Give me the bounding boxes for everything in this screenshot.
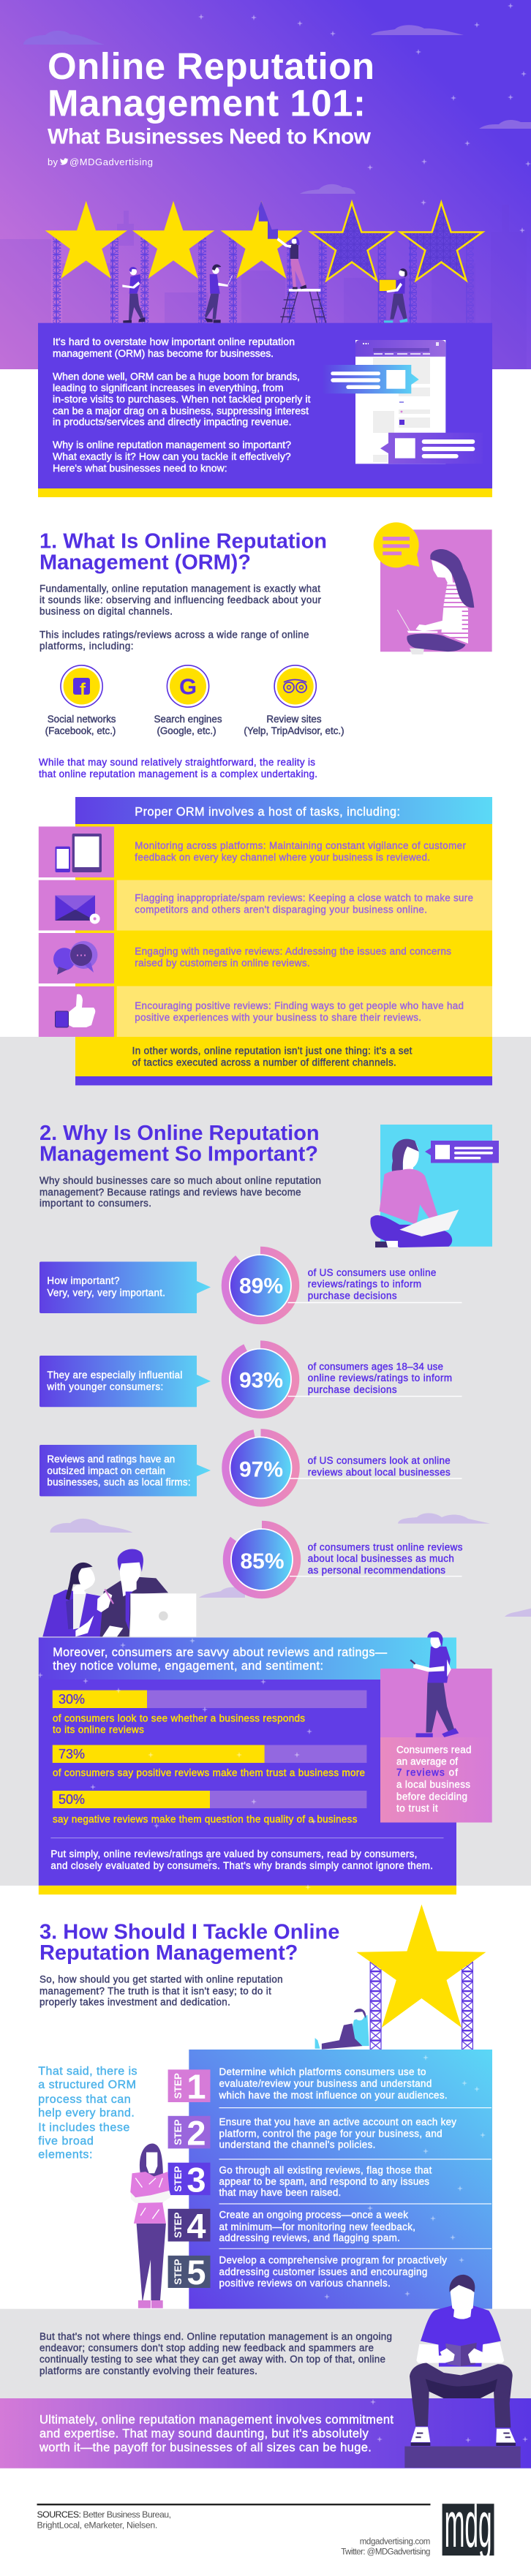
task descriptions: positive experiences with your business to share their reviews. <box>135 1012 421 1023</box>
section 1 body text: Fundamentally, online reputation management is exactly what <box>39 583 320 594</box>
scaffold towers <box>53 238 474 325</box>
bar 30 caption <box>53 1712 305 1735</box>
footer rule and sources: SOURCES: Better Business Bureau, <box>37 2509 171 2520</box>
in other words text: of tactics executed across a number of different channels. <box>132 1057 396 1068</box>
icon: facebook <box>61 665 102 707</box>
task descriptions: raised by customers in online reviews. <box>135 957 310 968</box>
donut stat captions: reviews/ratings to inform <box>308 1278 421 1289</box>
panel heading <box>53 1646 388 1673</box>
intro text: in products/services and directly impacting revenue. <box>53 416 291 428</box>
bar 30 caption: to its online reviews <box>53 1724 144 1735</box>
task descriptions: Engaging with negative reviews: Addressing the issues and concerns <box>135 945 451 956</box>
complex undertaking statement: that online reputation management is a complex undertaking. <box>39 768 317 779</box>
donut stat captions: online reviews/ratings to inform <box>308 1372 452 1383</box>
section 2 body text: management? Because ratings and reviews have become <box>39 1187 301 1198</box>
icon tile: chat bubbles <box>39 933 114 983</box>
icon: google: G <box>179 674 197 699</box>
platform labels: Search engines <box>154 714 222 725</box>
process intro text: a structured ORM <box>38 2079 136 2091</box>
section 3 body text: management? The truth is that it isn't easy; to do it <box>39 1986 271 1997</box>
section 1 body text <box>39 583 322 651</box>
panel: conclusion band: worth it—the payoff for businesses of all sizes can be huge. <box>39 2441 372 2455</box>
callout: younger consumers <box>39 1356 211 1407</box>
footer rule and sources <box>37 2504 430 2531</box>
panel: ongoing endeavor: But that's not where things end. Online reputation management is an ongoing <box>39 2331 392 2342</box>
platform labels: (Google, etc.) <box>157 725 216 736</box>
panel: ongoing endeavor: platforms are constantly evolving their features. <box>39 2365 257 2376</box>
task descriptions: Flagging inappropriate/spam reviews: Keeping a close watch to make sure <box>135 893 473 904</box>
step 1 <box>168 2066 448 2106</box>
sidebar text: 7 reviews of <box>396 1767 458 1778</box>
section 2 body text <box>39 1175 321 1209</box>
platform labels: Review sites <box>266 714 322 725</box>
step 1: which have the most influence on your audiences. <box>218 2090 448 2101</box>
callout: how important <box>39 1262 211 1313</box>
panel heading: Moreover, consumers are savvy about reviews and ratings— <box>53 1646 388 1659</box>
task descriptions: Encouraging positive reviews: Finding ways to get people who have had <box>135 1000 464 1011</box>
title <box>48 45 374 149</box>
step 3: 3 <box>187 2160 206 2199</box>
step 3 <box>168 2160 432 2199</box>
sidebar text: a local business <box>396 1779 470 1790</box>
background skyline <box>0 205 527 369</box>
task descriptions: feedback on every key channel where your business is reviewed. <box>135 852 430 863</box>
panel: ongoing endeavor: continually testing to see what they can get away with. On top of that, online <box>39 2354 385 2365</box>
step 3: appear to be spam, and respond to any issues <box>219 2176 429 2187</box>
icon: facebook: f <box>80 680 86 700</box>
callout: younger consumers: with younger consumers: <box>46 1381 163 1392</box>
step 1: evaluate/review your business and understand <box>219 2078 432 2089</box>
step 4: at minimum—for monitoring new feedback, <box>219 2221 415 2232</box>
section 2 body text: important to consumers. <box>39 1198 151 1209</box>
panel: conclusion band <box>0 2398 531 2469</box>
summary text: Put simply, online reviews/ratings are valued by consumers, read by consumers, <box>50 1848 417 1859</box>
donut stat captions: of consumers trust online reviews <box>308 1541 463 1552</box>
step 2: understand the channel's policies. <box>219 2139 375 2150</box>
section 3 heading <box>39 1920 339 1965</box>
intro text: leading to significant increases in everything, from <box>53 382 284 393</box>
process intro text: process that can <box>38 2093 131 2106</box>
donut stat captions: about local businesses as much <box>308 1553 454 1564</box>
footer contact: Twitter: @MDGadvertising <box>341 2547 430 2556</box>
step 3: STEP <box>173 2166 184 2192</box>
donut stat captions: reviews about local businesses <box>308 1467 451 1478</box>
step 5: addressing customer issues and encouraging <box>219 2266 427 2277</box>
panel: conclusion band: Ultimately, online reputation management involves commitment <box>39 2413 393 2426</box>
footer contact <box>341 2538 430 2556</box>
donut stat captions: purchase decisions <box>308 1290 397 1301</box>
sidebar text: an average of <box>396 1756 458 1767</box>
footer rule and sources: BrightLocal, eMarketer, Nielsen. <box>37 2520 157 2531</box>
illustration: man reading phone <box>410 1631 459 1737</box>
step 4: STEP <box>173 2212 184 2238</box>
panel: consumer savvy <box>37 1638 456 1895</box>
platform labels: (Facebook, etc.) <box>45 725 116 736</box>
summary text: and closely evaluated by consumers. That's why brands simply cannot ignore them. <box>50 1860 433 1871</box>
illustration: man on box reading <box>404 2275 521 2468</box>
platform labels: Social networks <box>48 714 116 725</box>
process intro text: help every brand. <box>38 2107 135 2120</box>
step 4: addressing reviews, and flagging spam. <box>219 2232 400 2243</box>
panel: five steps <box>168 2050 492 2309</box>
section 1 body text: This includes ratings/reviews across a wide range of online <box>39 630 309 641</box>
process intro text: That said, there is <box>38 2065 137 2077</box>
task descriptions: competitors and others aren't disparaging your business online. <box>135 904 427 915</box>
bar: 30 percent <box>53 1691 366 1708</box>
panel: ongoing endeavor: endeavor; consumers don't stop adding new feedback and spammers are <box>39 2343 374 2354</box>
donut stat captions: of US consumers look at online <box>308 1455 451 1466</box>
donut: 93 percent: 93% <box>239 1369 283 1393</box>
process intro text <box>38 2065 137 2161</box>
panel: conclusion band: and expertise. That may sound daunting, but it's absolutely <box>39 2427 369 2440</box>
section 2 heading: 2. Why Is Online Reputation <box>39 1122 320 1145</box>
section 1 heading <box>39 529 327 575</box>
section 2 heading <box>39 1122 320 1166</box>
callout: how important: How important? <box>47 1275 119 1286</box>
title: Online Reputation <box>48 45 374 87</box>
intro text <box>53 336 311 474</box>
intro text: What exactly is it? How can you tackle it effectively? <box>53 450 291 462</box>
donut: 97 percent: 97% <box>239 1457 283 1481</box>
section 2 heading: Management So Important? <box>39 1143 318 1166</box>
donut: 89 percent <box>225 1250 295 1321</box>
sidebar text <box>396 1745 471 1813</box>
section 1 heading: Management (ORM)? <box>39 551 251 575</box>
section 3 heading: 3. How Should I Tackle Online <box>39 1920 339 1944</box>
intro panel <box>38 323 492 497</box>
in other words text <box>132 1046 413 1068</box>
worker with phone <box>122 267 145 323</box>
worker on ladder placing star piece <box>277 237 326 323</box>
clouds in section 2 <box>50 1513 531 1617</box>
section 3 body text: So, how should you get started with online reputation <box>39 1974 283 1984</box>
illustration: couple at laptop <box>42 1549 196 1636</box>
callout: local firms <box>39 1445 211 1496</box>
complex undertaking statement: While that may sound relatively straightforward, the reality is <box>39 757 315 768</box>
intro text: in-store visits to purchases. When not tackled properly it <box>53 393 311 405</box>
step 2: STEP <box>173 2119 184 2145</box>
byline: by <box>48 156 59 167</box>
bar: 50 percent: 50% <box>59 1792 85 1807</box>
intro text: Here's what businesses need to know: <box>53 462 227 474</box>
platform labels: (Yelp, TripAdvisor, etc.) <box>244 725 344 736</box>
illustration: woman on laptop <box>374 522 492 654</box>
donut: 85 percent: 85% <box>240 1549 285 1574</box>
step 3: Go through all existing reviews, flag those that <box>219 2164 432 2175</box>
header background <box>0 0 531 369</box>
worker with laptop <box>205 265 233 323</box>
illustration: star on scaffold <box>315 1904 486 2050</box>
donut stat captions: of US consumers use online <box>308 1267 436 1278</box>
icon tile: devices <box>39 826 114 877</box>
section 1 body text: platforms, including: <box>39 641 133 651</box>
callout: local firms: Reviews and ratings have an <box>47 1454 175 1465</box>
icon: google <box>167 665 209 707</box>
donut: 93 percent <box>225 1345 295 1414</box>
title: What Businesses Need to Know <box>48 124 372 149</box>
donut stat captions: as personal recommendations <box>308 1565 445 1576</box>
intro text: Why is online reputation management so important? <box>53 439 291 450</box>
illustration: review website <box>323 340 483 464</box>
five rating stars <box>45 201 483 280</box>
callout: how important: Very, very, very important. <box>47 1287 165 1298</box>
bar: 30 percent: 30% <box>59 1692 85 1707</box>
intro text: can be a major drag on a business, suppressing interest <box>53 405 309 417</box>
donut stat captions <box>288 1267 463 1576</box>
figure sitting against tower <box>315 2009 369 2050</box>
clouds <box>23 25 531 194</box>
step 1: STEP <box>173 2073 184 2099</box>
process intro text: five broad <box>38 2135 94 2148</box>
panel: ORM tasks <box>39 797 492 1085</box>
panel heading: they notice volume, engagement, and sentiment: <box>53 1660 323 1673</box>
worker carrying box <box>379 268 407 322</box>
bar: 50 percent <box>53 1791 366 1808</box>
illustration: standing woman <box>130 2144 171 2308</box>
section 3 heading: Reputation Management? <box>39 1941 298 1965</box>
section 3 body text: properly takes investment and dedication. <box>39 1997 230 2008</box>
step 2 <box>168 2113 456 2152</box>
section 2 body text: Why should businesses care so much about online reputation <box>39 1175 321 1186</box>
step 5: positive reviews on various channels. <box>219 2278 391 2289</box>
sparkles <box>324 2055 486 2300</box>
section 1 heading: 1. What Is Online Reputation <box>39 529 327 553</box>
step 5: STEP <box>173 2259 184 2285</box>
donut: 89 percent: 89% <box>239 1274 283 1299</box>
step 5: Develop a comprehensive program for proactively <box>219 2255 447 2265</box>
footer contact: mdgadvertising.com <box>360 2538 430 2547</box>
callout: local firms: outsized impact on certain <box>47 1465 165 1476</box>
intro text: It's hard to overstate how important online reputation <box>53 336 295 347</box>
step 1: 1 <box>187 2067 206 2106</box>
donut stat captions: purchase decisions <box>308 1384 397 1395</box>
complex undertaking statement <box>39 757 317 779</box>
step 2: Ensure that you have an active account on each key <box>219 2117 456 2128</box>
callout: local firms: businesses, such as local firms: <box>47 1477 191 1488</box>
bar 50 caption: say negative reviews make them question the quality of a business <box>53 1813 358 1825</box>
step 5: 5 <box>187 2253 206 2292</box>
step 4: Create an ongoing process—once a week <box>219 2210 408 2221</box>
tasks header bar <box>75 797 492 824</box>
section 1 body text: it sounds like: observing and influencing feedback about your <box>39 594 322 605</box>
bar: 73 percent <box>53 1745 366 1763</box>
sidebar text: Consumers read <box>396 1745 471 1755</box>
panel: ongoing endeavor <box>0 2309 531 2398</box>
bar 73 caption: of consumers say positive reviews make them trust a business more <box>53 1767 365 1778</box>
intro text: management (ORM) has become for businesses. <box>53 347 274 359</box>
icon: tripadvisor <box>274 665 316 707</box>
bar: 73 percent: 73% <box>59 1747 85 1761</box>
task descriptions <box>135 840 473 1023</box>
intro text: When done well, ORM can be a huge boom for brands, <box>53 370 300 382</box>
sparkles <box>198 3 531 233</box>
process intro text: elements: <box>38 2149 92 2161</box>
step 4 <box>168 2206 415 2245</box>
sidebar text: before deciding <box>396 1791 467 1802</box>
step 5 <box>168 2253 447 2292</box>
panel: pink sidebar <box>380 1631 492 1822</box>
sparkles <box>37 1638 317 1890</box>
illustration: woman with laptop on cyan <box>370 1125 499 1247</box>
donut: 85 percent <box>227 1525 297 1594</box>
task descriptions: Monitoring across platforms: Maintaining constant vigilance of customer <box>135 840 467 851</box>
tasks header bar: Proper ORM involves a host of tasks, including: <box>135 805 400 818</box>
process intro text: It includes these <box>38 2121 129 2134</box>
donut stat captions: of consumers ages 18–34 use <box>308 1361 443 1372</box>
icon tile: envelope <box>39 880 114 930</box>
title: Management 101: <box>48 82 366 124</box>
byline: @MDGadvertising <box>69 156 153 167</box>
summary text <box>50 1848 433 1871</box>
donut: 97 percent <box>226 1433 295 1503</box>
step 1: Determine which platforms consumers use to <box>219 2066 426 2077</box>
platform labels <box>45 714 344 736</box>
section 3 body text <box>39 1974 283 2008</box>
sidebar text: to trust it <box>396 1802 438 1813</box>
callout: younger consumers: They are especially influential <box>47 1370 182 1380</box>
icon tile: thumbs up <box>39 986 114 1037</box>
in other words text: In other words, online reputation isn't just one thing: it's a set <box>132 1046 413 1057</box>
step 2: 2 <box>187 2113 206 2152</box>
step 4: 4 <box>187 2206 206 2245</box>
step 2: platform, control the page for your business, and <box>219 2128 442 2139</box>
step 3: that may have been raised. <box>219 2187 341 2198</box>
section 1 body text: business on digital channels. <box>39 606 173 617</box>
panel: gray section 2 background <box>0 1037 531 1886</box>
bar 30 caption: of consumers look to see whether a business responds <box>53 1712 305 1723</box>
